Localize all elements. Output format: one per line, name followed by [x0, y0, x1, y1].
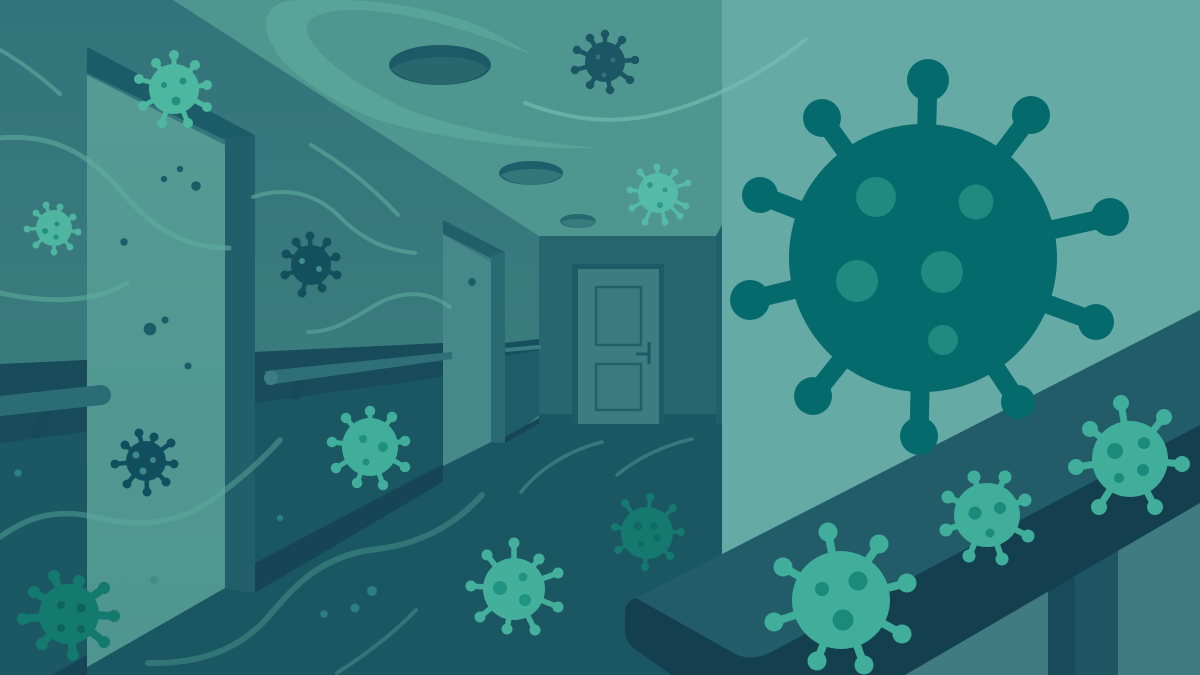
door frame top: [87, 47, 255, 140]
door frame side: [491, 252, 505, 443]
body: [789, 124, 1057, 392]
droplet on door: [150, 576, 158, 584]
side wall wainscot: [0, 339, 539, 675]
virus: light on ceiling: [630, 167, 688, 222]
virus: on floor light: [471, 543, 558, 630]
rail bracket middle: [292, 380, 303, 400]
virus: right on handrail: [1076, 403, 1182, 507]
rail front face: [625, 425, 1200, 675]
ceiling swirl: [266, 0, 600, 148]
air current floor long: [148, 495, 482, 663]
ceiling light 3: [560, 214, 596, 228]
virus: dark on door: [115, 433, 174, 492]
air current top left: [0, 50, 60, 94]
rail bracket left: [30, 412, 50, 438]
second door: [443, 220, 505, 466]
far door: [572, 264, 664, 424]
wainscot far section: [505, 339, 539, 443]
ceiling light 1: [389, 45, 491, 85]
wainscot band far section: [505, 339, 539, 356]
area under rail right: [1118, 490, 1200, 675]
wainscot dark band left section: [0, 360, 87, 443]
air current long left: [0, 137, 229, 248]
floor: [87, 424, 722, 675]
spikes: [750, 80, 1110, 436]
air current across door: [0, 440, 280, 537]
virus: on floor dark: [615, 497, 681, 567]
area under rail left: [905, 592, 1048, 675]
virus: on wainscot: [332, 411, 405, 485]
surface spots: [836, 177, 994, 355]
right side return wall: [716, 225, 722, 432]
air current floor low: [337, 610, 416, 673]
virus: large on handrail: [774, 532, 907, 665]
handrail middle: [265, 352, 452, 385]
droplets teal: [14, 469, 377, 618]
ceiling: [173, 0, 722, 236]
ceiling air current: [525, 39, 806, 120]
droplets dark: [120, 166, 476, 370]
door leaf: [578, 269, 659, 424]
far wall skirting: [539, 414, 717, 425]
droplets: [14, 166, 476, 618]
left wall: [0, 0, 540, 675]
door handle: [636, 342, 649, 364]
upper panel: [596, 287, 641, 345]
spike tips: [730, 59, 1129, 455]
air current wall upper: [311, 145, 398, 215]
air current wall low: [308, 294, 450, 332]
far section rail: [507, 347, 539, 350]
open door panel foreground: [87, 47, 255, 667]
far end wall: [539, 236, 717, 424]
rail top face: [636, 310, 1200, 657]
ceiling light 2: [499, 161, 563, 185]
door frame top: [443, 220, 505, 258]
skirting left: [52, 655, 87, 675]
air current near door 1: [521, 442, 602, 492]
virus: middle on handrail: [946, 477, 1028, 559]
foreground handrail: [625, 310, 1200, 675]
air current lower left: [0, 283, 127, 300]
wainscot lower left section: [0, 360, 87, 675]
handrail middle end: [264, 371, 278, 385]
virus: bottom left: [23, 576, 114, 655]
virus: on door frame: [139, 55, 207, 123]
skirting far section: [505, 418, 539, 443]
door leaf: [443, 234, 491, 466]
large virus: [730, 59, 1129, 455]
air current wall middle: [253, 192, 415, 253]
lower panel: [596, 364, 641, 410]
air current near door 2: [617, 439, 692, 475]
virus: dark on middle wall: [285, 236, 337, 293]
door leaf: [87, 75, 225, 667]
wainscot lower wall, mid section: [255, 343, 443, 593]
door frame: [572, 264, 664, 424]
rail post: [1048, 530, 1118, 675]
door frame side: [225, 135, 255, 593]
rail post shadow edge: [1048, 565, 1075, 675]
virus: dark on ceiling: [575, 34, 635, 90]
air currents over the walls and floor: [0, 50, 692, 673]
handrail left: [0, 395, 101, 406]
virus: small left wall: [27, 205, 78, 252]
wainscot dark band, mid section: [255, 343, 443, 403]
right foreground wall: [722, 0, 1200, 560]
skirting, mid section: [255, 464, 443, 593]
